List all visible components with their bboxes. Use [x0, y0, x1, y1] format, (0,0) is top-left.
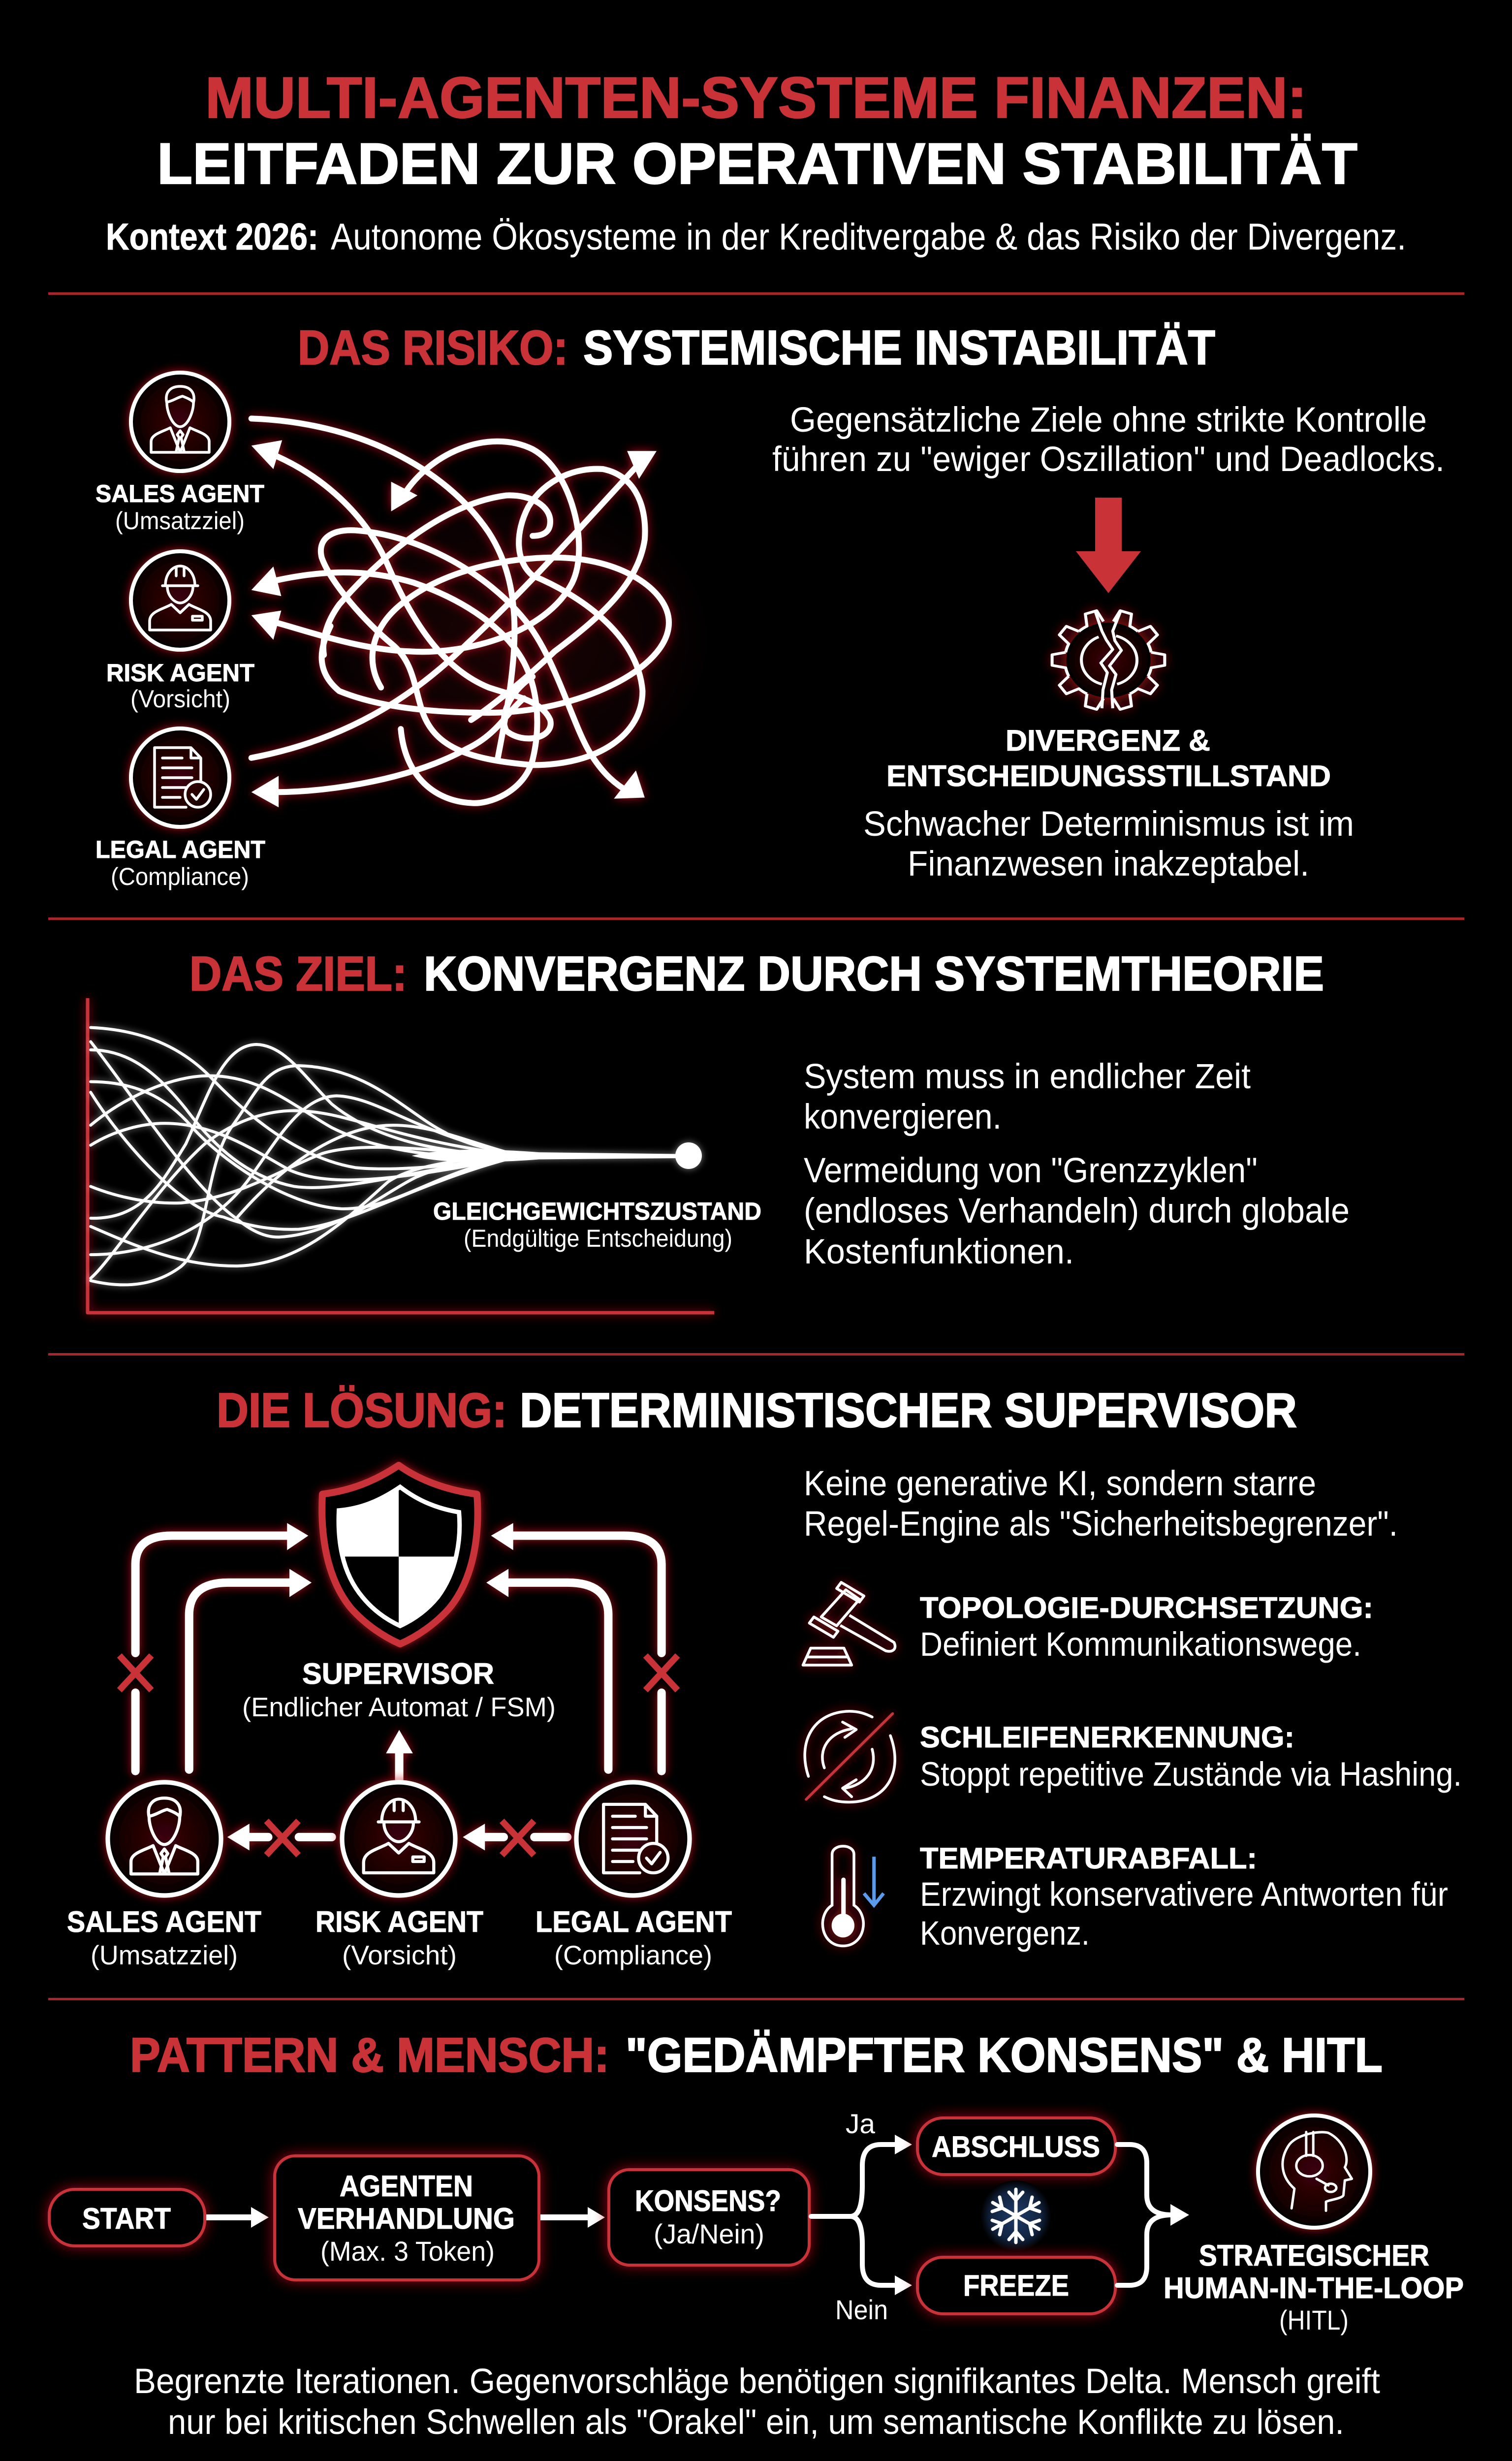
text: topology: TOPOLOGIE-DURCHSETZUNG:: [920, 1591, 1373, 1624]
heading: das risiko: DAS RISIKO:: [298, 320, 568, 375]
label: supervisor: [242, 1657, 556, 1722]
flow diagram: [49, 2108, 1464, 2335]
text: temperature: [920, 1842, 1448, 1952]
text: risk description: [772, 401, 1445, 479]
label: equilibrium: [433, 1198, 761, 1252]
trajectories: [91, 1028, 702, 1285]
panel: agents list: [95, 373, 265, 890]
title: [157, 65, 1357, 196]
icon: risk agent: [131, 551, 229, 650]
text: topology: Definiert Kommunikationswege.: [920, 1625, 1361, 1663]
icon: gavel: [803, 1582, 895, 1665]
label: sales agent: (Umsatzziel): [115, 507, 245, 535]
label: risk agent: RISK AGENT: [315, 1905, 483, 1938]
label: risk agent: (Vorsicht): [130, 685, 230, 713]
text: loop detection: Stoppt repetitive Zustände via Hashing.: [920, 1755, 1462, 1793]
text: convergence description: [804, 1057, 1350, 1271]
label: risk agent: [315, 1905, 483, 1970]
title: LEITFADEN ZUR OPERATIVEN STABILITÄT: [157, 131, 1357, 196]
label: supervisor: SUPERVISOR: [302, 1657, 494, 1690]
node: consensus: KONSENS?: [635, 2184, 781, 2217]
text: convergence description: (endloses Verhandeln) durch globale: [804, 1192, 1350, 1230]
text: temperature: TEMPERATURABFALL:: [920, 1842, 1257, 1875]
text: risk description: Gegensätzliche Ziele ohne strikte Kontrolle: [790, 401, 1427, 440]
text: temperature: Erzwingt konservativere Antworten für: [920, 1875, 1448, 1913]
diagram: supervisor: [67, 1465, 732, 1970]
text: convergence description: Kostenfunktionen.: [804, 1232, 1074, 1271]
icon: sales agent: [131, 373, 229, 471]
text: rule engine intro: [804, 1464, 1398, 1544]
icon: thermometer: [822, 1846, 863, 1946]
label: divergence: DIVERGENZ &: [1006, 724, 1210, 757]
icon: legal agent: [131, 728, 229, 827]
icon: snowflake: [980, 2180, 1051, 2251]
arrow: merge: [1117, 2145, 1189, 2285]
node: negotiation: [275, 2156, 539, 2280]
text: rule engine intro: Keine generative KI, sondern starre: [804, 1464, 1316, 1503]
label: legal agent: [95, 836, 265, 890]
icon: legal agent: [576, 1782, 690, 1895]
label: hitl: (HITL): [1279, 2304, 1349, 2335]
node: freeze: [917, 2257, 1115, 2314]
label: legal agent: LEGAL AGENT: [95, 836, 265, 863]
heading: pattern and human: "GEDÄMPFTER KONSENS" & HITL: [626, 2028, 1383, 2082]
label: sales agent: SALES AGENT: [67, 1905, 261, 1938]
label: legal agent: [536, 1905, 732, 1970]
arrow: negotiation to consensus: [540, 2207, 605, 2228]
label: legal agent: (Compliance): [111, 863, 249, 890]
icon: loop blocked: [805, 1711, 895, 1802]
heading: pattern and human: [130, 2028, 1383, 2082]
text: topology: [920, 1591, 1373, 1663]
label: equilibrium: GLEICHGEWICHTSZUSTAND: [433, 1198, 761, 1225]
text: risk description: führen zu "ewiger Oszillation" und Deadlocks.: [772, 440, 1445, 479]
text: iterations: nur bei kritischen Schwellen als "Orakel" ein, um semantische Konflikte zu lösen.: [168, 2403, 1344, 2442]
text: loop detection: SCHLEIFENERKENNUNG:: [920, 1721, 1294, 1754]
label: ja: Ja: [846, 2108, 876, 2139]
text: convergence description: konvergieren.: [804, 1098, 1002, 1136]
title: MULTI-AGENTEN-SYSTEME FINANZEN:: [205, 65, 1307, 130]
text: rule engine intro: Regel-Engine als "Sicherheitsbegrenzer".: [804, 1505, 1398, 1544]
label: risk agent: [106, 659, 254, 713]
node: abschluss: [917, 2118, 1115, 2175]
label: hitl: HUMAN-IN-THE-LOOP: [1164, 2272, 1464, 2304]
heading: das risiko: [298, 320, 1215, 375]
icon: cooling arrow: [864, 1857, 883, 1905]
node: consensus: (Ja/Nein): [654, 2218, 764, 2249]
icon: risk agent: [342, 1782, 455, 1895]
node: start: START: [82, 2202, 171, 2235]
heading: das ziel: DAS ZIEL:: [189, 947, 407, 1001]
heading: das risiko: SYSTEMISCHE INSTABILITÄT: [583, 320, 1215, 375]
heading: die loesung: [217, 1383, 1297, 1437]
icon: blocked crosses: [120, 1656, 678, 1855]
text: iterations: [134, 2362, 1380, 2442]
heading: die loesung: DETERMINISTISCHER SUPERVISOR: [520, 1383, 1297, 1437]
arrow: branch: [811, 2135, 912, 2295]
text: weak determinism: Finanzwesen inakzeptabel.: [908, 845, 1309, 883]
heading: die loesung: DIE LÖSUNG:: [217, 1383, 507, 1437]
label: sales agent: SALES AGENT: [95, 480, 264, 507]
label: sales agent: (Umsatzziel): [91, 1940, 238, 1970]
icon: shield: [322, 1465, 478, 1644]
node: abschluss: ABSCHLUSS: [932, 2130, 1100, 2163]
text: weak determinism: [863, 805, 1354, 883]
label: legal agent: (Compliance): [554, 1940, 712, 1970]
node: start: [49, 2189, 205, 2246]
icon: broken gear: [1052, 610, 1165, 710]
label: hitl: STRATEGISCHER: [1199, 2239, 1429, 2272]
label: equilibrium: (Endgültige Entscheidung): [464, 1225, 732, 1252]
heading: pattern and human: PATTERN & MENSCH:: [130, 2028, 609, 2082]
text: temperature: Konvergenz.: [920, 1914, 1090, 1952]
node: negotiation: (Max. 3 Token): [320, 2236, 495, 2267]
text: convergence description: System muss in endlicher Zeit: [804, 1057, 1251, 1096]
arrow: down red: [1076, 498, 1141, 593]
label: divergence: ENTSCHEIDUNGSSTILLSTAND: [886, 759, 1331, 792]
node: negotiation: VERHANDLUNG: [298, 2202, 515, 2235]
text: loop detection: [920, 1721, 1462, 1793]
icon: sales agent: [108, 1782, 221, 1895]
icon: human in the loop: [1258, 2115, 1370, 2228]
label: sales agent: [95, 480, 264, 535]
label: hitl: [1164, 2239, 1464, 2335]
label: divergence: [886, 724, 1331, 792]
chart: tangled arrows: [252, 418, 669, 807]
text: weak determinism: Schwacher Determinismus ist im: [863, 805, 1354, 844]
node: consensus: [609, 2170, 809, 2265]
subtitle: Autonome Ökosysteme in der Kreditvergabe & das Risiko der Divergenz.: [331, 216, 1406, 258]
label: legal agent: LEGAL AGENT: [536, 1905, 732, 1938]
text: convergence description: Vermeidung von "Grenzzyklen": [804, 1151, 1258, 1190]
label: supervisor: (Endlicher Automat / FSM): [242, 1692, 556, 1722]
subtitle: Kontext 2026:: [106, 216, 318, 258]
label: sales agent: [67, 1905, 261, 1970]
heading: das ziel: KONVERGENZ DURCH SYSTEMTHEORIE: [424, 947, 1324, 1001]
node: freeze: FREEZE: [963, 2269, 1069, 2302]
label: risk agent: (Vorsicht): [342, 1940, 457, 1970]
text: iterations: Begrenzte Iterationen. Gegenvorschläge benötigen signifikantes Delta. Mensch greift: [134, 2362, 1380, 2401]
node: negotiation: AGENTEN: [340, 2170, 473, 2203]
label: risk agent: RISK AGENT: [106, 659, 254, 687]
arrows to supervisor: [135, 1523, 662, 1851]
chart: convergence: [88, 998, 761, 1313]
arrow: start to negotiation: [206, 2207, 269, 2228]
label: nein: Nein: [835, 2294, 888, 2325]
chart axes: [88, 998, 714, 1313]
